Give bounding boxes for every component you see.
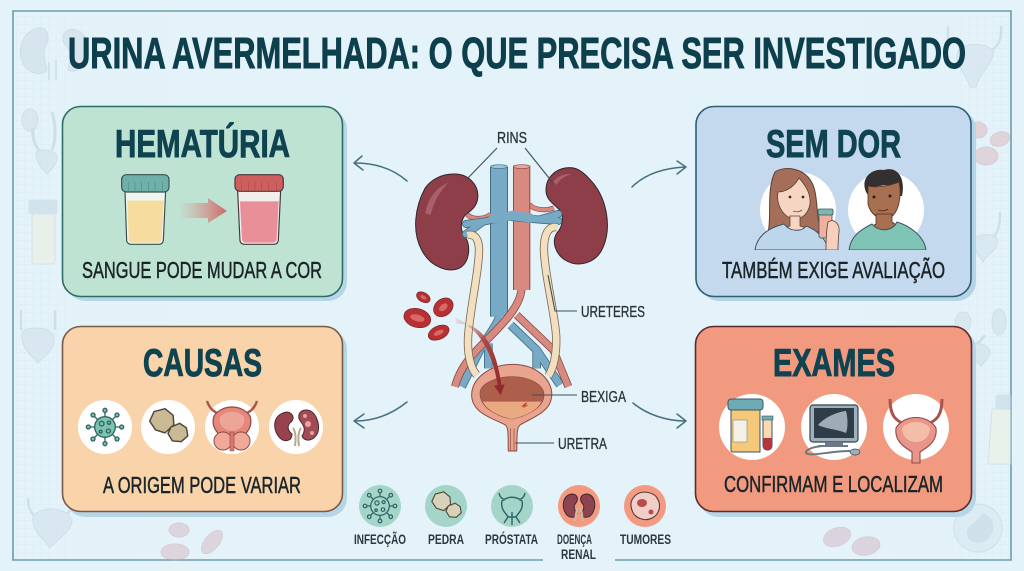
ghost urinary system right bbox=[955, 309, 1006, 366]
panel: causas bbox=[62, 326, 347, 517]
ghost jar right bbox=[988, 395, 1011, 464]
label: ureteres: URETERES bbox=[581, 304, 645, 321]
ghost kidneys top left bbox=[20, 28, 88, 80]
legend item: doença renal bbox=[557, 485, 600, 562]
heading: exames: EXAMES bbox=[773, 342, 895, 385]
icon: woman with sample bbox=[755, 168, 839, 250]
panel: sem dor bbox=[696, 106, 976, 301]
heading: hematúria: HEMATÚRIA bbox=[115, 122, 290, 166]
right ureter bbox=[544, 227, 557, 376]
caption: A ORIGEM PODE VARIAR bbox=[103, 472, 301, 498]
icon: red urine jar bbox=[235, 175, 283, 244]
red blood cells bbox=[402, 290, 457, 343]
caption: CONFIRMAM E LOCALIZAM bbox=[724, 471, 943, 497]
panel: hematúria bbox=[62, 106, 347, 301]
icon: bladder and prostate bbox=[205, 400, 259, 454]
icon: bladder bbox=[883, 394, 949, 463]
caption: SANGUE PODE MUDAR A COR bbox=[82, 257, 322, 283]
legend item: próstata bbox=[485, 485, 538, 547]
artery bbox=[455, 165, 568, 387]
kidney highlights bbox=[425, 174, 572, 215]
right kidney bbox=[546, 168, 607, 264]
ghost bladder bottom left bbox=[28, 498, 72, 548]
legend item: infecção bbox=[354, 485, 406, 547]
legend item: infecção: INFECÇÃO bbox=[354, 532, 406, 547]
background grid right bbox=[992, 16, 1008, 552]
legend item: doença renal: RENAL bbox=[561, 547, 596, 562]
background grid left bbox=[16, 16, 32, 552]
icon: stones bbox=[141, 400, 195, 454]
icon: virus bbox=[78, 400, 132, 454]
arrow: to sem dor bbox=[632, 161, 686, 187]
legend item: tumores bbox=[620, 485, 671, 547]
central anatomy diagram bbox=[402, 165, 607, 451]
icon: urine and blood samples bbox=[719, 394, 785, 460]
left kidney bbox=[416, 174, 478, 270]
arrow: to exames bbox=[633, 403, 686, 428]
leader lines bbox=[468, 148, 577, 443]
renal artery bbox=[467, 204, 554, 218]
heading: causas: CAUSAS bbox=[143, 342, 262, 385]
label: bexiga: BEXIGA bbox=[581, 389, 626, 406]
legend item: próstata: PRÓSTATA bbox=[485, 532, 538, 547]
blood flow arrow bbox=[455, 317, 505, 395]
ghost blood cells bottom right bbox=[821, 524, 881, 557]
ghost bladder top right bbox=[948, 26, 1001, 87]
label: uretra: URETRA bbox=[558, 436, 607, 453]
icon: kidneys bbox=[269, 400, 323, 454]
bladder bbox=[472, 364, 552, 451]
icon: yellow urine jar bbox=[122, 175, 169, 244]
label: rins: RINS bbox=[497, 130, 527, 147]
renal vein bbox=[466, 214, 558, 234]
caption: TAMBÉM EXIGE AVALIAÇÃO bbox=[722, 257, 945, 283]
ghost urinary system left bbox=[22, 109, 57, 174]
ghost blood cells bottom bbox=[161, 523, 226, 560]
ghost bladder right bbox=[974, 212, 1000, 262]
ghost bladder left bbox=[21, 310, 55, 363]
legend item: tumores: TUMORES bbox=[620, 532, 671, 547]
ghost cell right bbox=[954, 504, 1002, 552]
left ureter bbox=[467, 235, 479, 375]
icon: ultrasound bbox=[801, 394, 867, 460]
ghost jar left bbox=[29, 200, 57, 264]
legend bbox=[354, 485, 671, 562]
arrow: to causas bbox=[354, 402, 407, 428]
blood vein bbox=[462, 167, 560, 387]
ghost blood cells top right bbox=[969, 122, 1012, 165]
heading: sem dor: SEM DOR bbox=[766, 123, 901, 166]
arrow: colour change bbox=[178, 198, 227, 223]
icon: man bbox=[848, 169, 926, 250]
arrow: to hematúria bbox=[354, 156, 407, 181]
legend item: doença renal: DOENÇA bbox=[557, 532, 592, 547]
panel: exames bbox=[696, 326, 976, 517]
legend item: pedra bbox=[425, 485, 467, 547]
legend item: pedra: PEDRA bbox=[428, 532, 464, 547]
